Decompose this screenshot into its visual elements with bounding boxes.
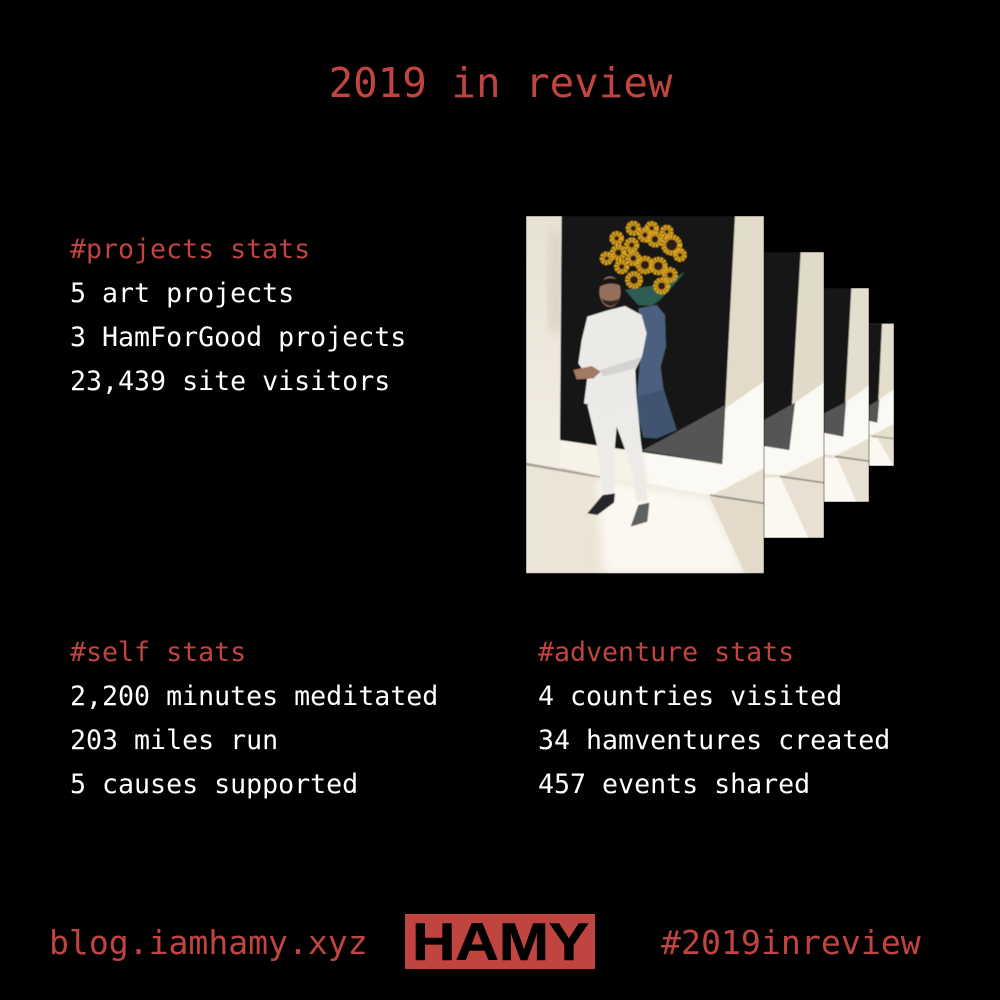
photo slice: main portrait bbox=[526, 216, 764, 573]
logo: HAMY: HAMY bbox=[412, 913, 589, 972]
stat: miles run: 203 miles run bbox=[70, 725, 278, 756]
person: shirt bbox=[578, 306, 647, 409]
stat: art projects: 5 art projects bbox=[70, 278, 294, 309]
artwork: sunflowers bbox=[602, 223, 684, 292]
stat: causes supported: 5 causes supported bbox=[70, 769, 358, 800]
artwork: leaves bbox=[625, 272, 685, 306]
person: trousers bbox=[587, 398, 647, 502]
heading: adventure stats: #adventure stats bbox=[538, 637, 794, 668]
stat: minutes meditated: 2,200 minutes meditated bbox=[70, 681, 438, 712]
artwork: blue dress bbox=[636, 305, 677, 438]
footer: blog url: blog.iamhamy.xyz bbox=[49, 923, 368, 962]
stat: events shared: 457 events shared bbox=[538, 769, 810, 800]
stat: site visitors: 23,439 site visitors bbox=[70, 366, 390, 397]
person: hands bbox=[573, 366, 601, 379]
heading: projects stats: #projects stats bbox=[70, 234, 310, 265]
stat: HamForGood projects: 3 HamForGood projects bbox=[70, 322, 406, 353]
photo slice: fourth bbox=[869, 323, 894, 466]
photo slice: second bbox=[764, 252, 824, 538]
title: 2019 in review bbox=[329, 59, 673, 107]
panel: adventure stats bbox=[538, 637, 890, 800]
photo: portrait with receding slices bbox=[526, 216, 894, 573]
footer: hashtag: #2019inreview bbox=[661, 923, 921, 962]
person: head bbox=[599, 276, 621, 307]
stat: hamventures created: 34 hamventures created bbox=[538, 725, 890, 756]
person: shoes bbox=[587, 493, 615, 515]
photo slice: third bbox=[824, 288, 869, 502]
panel: self stats bbox=[70, 637, 438, 800]
heading: self stats: #self stats bbox=[70, 637, 246, 668]
stat: countries visited: 4 countries visited bbox=[538, 681, 842, 712]
panel: projects stats bbox=[70, 234, 406, 397]
